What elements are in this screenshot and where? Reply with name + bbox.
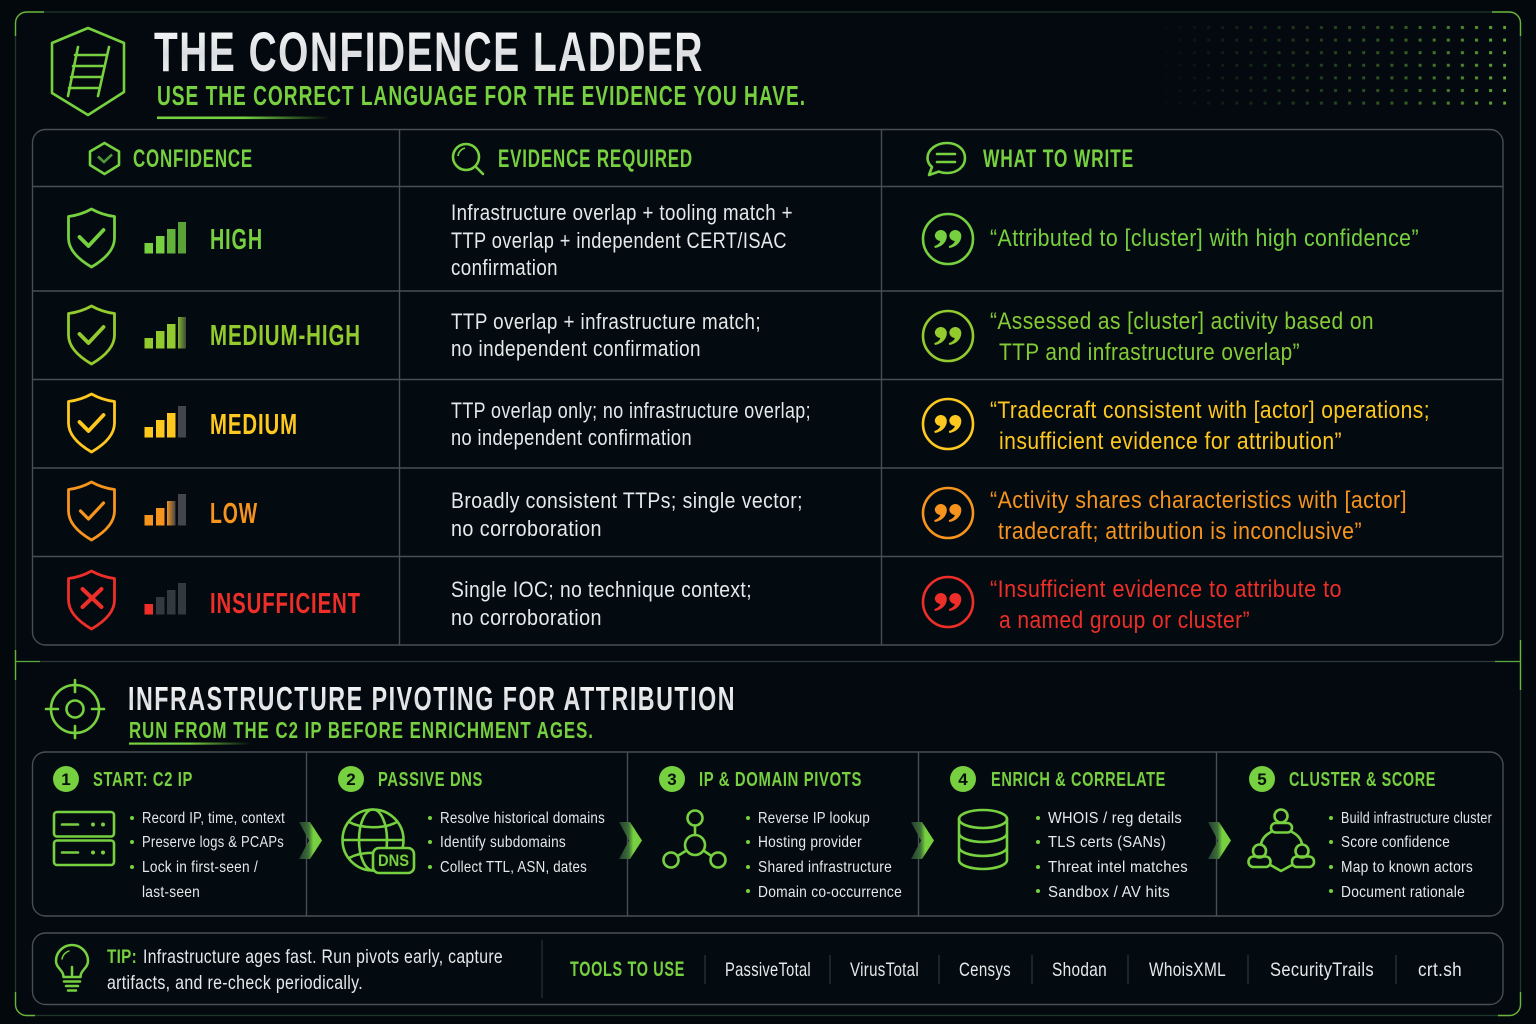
label: high: HIGH — [210, 224, 263, 256]
tip text: TIP: — [107, 946, 137, 968]
quote: low: tradecraft; attribution is inconclusive” — [998, 518, 1362, 545]
step 4 heading — [950, 766, 1166, 792]
tools list: Censys — [959, 959, 1011, 981]
icon: medium quote — [923, 399, 973, 449]
evidence: medium-high: no independent confirmation — [451, 336, 701, 361]
tip text: artifacts, and re-check periodically. — [107, 972, 363, 994]
table header: confidence — [90, 143, 253, 174]
panel: confidence table — [32, 130, 1503, 645]
icon: globe with DNS badge — [342, 810, 414, 873]
step 1 heading: START: C2 IP — [93, 768, 193, 791]
icon: insufficient quote — [923, 577, 973, 627]
quote: medium: insufficient evidence for attribution” — [999, 428, 1342, 455]
icon: high shield — [68, 209, 114, 267]
icon: globe with DNS badge: DNS — [378, 851, 409, 870]
quote: medium-high: “Assessed as [cluster] activity based on — [990, 308, 1374, 335]
quote: medium-high: TTP and infrastructure overlap” — [999, 339, 1300, 366]
evidence: insufficient — [451, 577, 752, 630]
evidence: high: TTP overlap + independent CERT/ISAC — [451, 228, 787, 253]
icon: high quote — [923, 214, 973, 264]
quote: insufficient — [990, 576, 1342, 634]
step 1 bullets: Record IP, time, context — [142, 810, 285, 827]
step 4 bullets: Sandbox / AV hits — [1048, 884, 1170, 901]
evidence: medium: TTP overlap only; no infrastructure overlap; — [451, 398, 811, 423]
tools list — [705, 955, 1462, 984]
tip text — [107, 946, 503, 994]
tools list: PassiveTotal — [725, 959, 811, 981]
row: medium — [68, 394, 1430, 455]
quote: high: “Attributed to [cluster] with high confidence” — [990, 225, 1419, 252]
step 1 heading: 1 — [61, 770, 71, 789]
quote: medium: “Tradecraft consistent with [actor] operations; — [990, 397, 1430, 424]
quote: medium — [990, 397, 1430, 455]
step 3 bullets: Reverse IP lookup — [758, 810, 870, 827]
section heading: INFRASTRUCTURE PIVOTING FOR ATTRIBUTION — [128, 681, 736, 718]
icon: low shield — [68, 482, 114, 540]
step 4 bullets — [1036, 810, 1188, 901]
step 1 bullets: Preserve logs & PCAPs — [142, 834, 284, 851]
icon: shield with ladder — [52, 28, 124, 115]
step 3 bullets — [746, 810, 902, 901]
icon: medium-high shield — [68, 306, 114, 364]
step 3 — [659, 766, 902, 901]
step 2 bullets — [428, 810, 605, 876]
icon: network nodes — [664, 810, 726, 868]
step 4 heading: 4 — [958, 770, 968, 789]
icon: server — [54, 812, 114, 865]
icon: insufficient signal bars — [144, 583, 186, 614]
step 1 bullets — [130, 810, 285, 901]
evidence: low: Broadly consistent TTPs; single vector; — [451, 488, 803, 513]
step 4 bullets: TLS certs (SANs) — [1048, 834, 1166, 851]
icon: low quote — [923, 488, 973, 538]
evidence: medium: no independent confirmation — [451, 425, 692, 450]
step 5 bullets: Document rationale — [1341, 884, 1465, 901]
evidence: high: Infrastructure overlap + tooling match + — [451, 200, 793, 225]
icon: target — [46, 680, 104, 738]
quote: low — [990, 487, 1407, 545]
icon: medium-high signal bars — [144, 317, 186, 348]
table header: what to write: WHAT TO WRITE — [983, 145, 1134, 173]
arrow 1 — [299, 822, 322, 859]
label: insufficient: INSUFFICIENT — [210, 588, 361, 620]
evidence: high: confirmation — [451, 255, 558, 280]
title: THE CONFIDENCE LADDER — [154, 20, 704, 83]
evidence: medium-high: TTP overlap + infrastructure match; — [451, 309, 761, 334]
row: medium-high — [68, 306, 1374, 366]
arrow 2 — [619, 822, 642, 859]
icon: medium signal bars — [144, 406, 186, 438]
evidence: low: no corroboration — [451, 516, 602, 541]
table header: what to write — [928, 143, 1134, 175]
tools list: crt.sh — [1418, 959, 1462, 981]
label: low: LOW — [210, 498, 258, 530]
icon: database — [959, 810, 1007, 869]
step 3 bullets: Domain co-occurrence — [758, 884, 902, 901]
step 3 bullets: Hosting provider — [758, 834, 862, 851]
row: low — [68, 482, 1407, 545]
table header: evidence required — [453, 144, 693, 174]
section underline — [129, 742, 251, 745]
label: medium: MEDIUM — [210, 409, 298, 441]
step 2 bullets: Collect TTL, ASN, dates — [440, 859, 587, 876]
icon: light bulb — [56, 945, 88, 990]
step 2 heading — [338, 766, 483, 792]
quote: insufficient: a named group or cluster” — [999, 607, 1250, 634]
quote: low: “Activity shares characteristics with [actor] — [990, 487, 1407, 514]
quote: insufficient: “Insufficient evidence to attribute to — [990, 576, 1342, 603]
step 3 heading: 3 — [667, 770, 677, 789]
subtitle: USE THE CORRECT LANGUAGE FOR THE EVIDENCE YOU HAVE. — [157, 80, 806, 111]
step 5 bullets: Build infrastructure cluster — [1341, 810, 1492, 827]
step 2 heading: 2 — [346, 770, 356, 789]
icon: low signal bars — [144, 494, 186, 526]
step 4 — [950, 766, 1188, 901]
tools list: VirusTotal — [850, 959, 919, 981]
panel: pivot steps — [32, 752, 1503, 916]
step 4 bullets: WHOIS / reg details — [1048, 810, 1182, 827]
table header: evidence required: EVIDENCE REQUIRED — [498, 145, 693, 173]
icon: medium-high quote — [923, 311, 973, 361]
arrow 4 — [1208, 822, 1231, 859]
step 2 — [338, 766, 605, 876]
step 5 heading: CLUSTER & SCORE — [1289, 768, 1436, 791]
evidence: medium — [451, 398, 811, 450]
step 5 bullets: Score confidence — [1341, 834, 1450, 851]
step 1 heading — [53, 766, 193, 792]
tip text: Infrastructure ages fast. Run pivots early, capture — [143, 946, 503, 968]
evidence: low — [451, 488, 803, 541]
label: medium-high: MEDIUM-HIGH — [210, 320, 361, 352]
quote: medium-high — [990, 308, 1374, 366]
step 5 — [1248, 766, 1492, 901]
step 2 bullets: Identify subdomains — [440, 834, 566, 851]
tools list: Shodan — [1052, 959, 1107, 981]
icon: medium shield — [68, 394, 114, 452]
table header: confidence: CONFIDENCE — [133, 145, 253, 173]
step 2 bullets: Resolve historical domains — [440, 810, 605, 827]
step 5 bullets — [1329, 810, 1492, 901]
row: insufficient — [68, 571, 1342, 634]
tools list: SecurityTrails — [1270, 959, 1374, 981]
evidence: insufficient: Single IOC; no technique context; — [451, 577, 752, 602]
evidence: medium-high — [451, 309, 761, 361]
step 1 — [53, 766, 285, 901]
step 4 bullets: Threat intel matches — [1048, 859, 1188, 876]
step 4 heading: ENRICH & CORRELATE — [991, 768, 1166, 791]
evidence: insufficient: no corroboration — [451, 605, 602, 630]
step 5 bullets: Map to known actors — [1341, 859, 1473, 876]
step 3 heading: IP & DOMAIN PIVOTS — [699, 768, 862, 791]
row: high — [68, 200, 1419, 280]
decorative dot grid — [1180, 26, 1506, 105]
step 1 bullets: last-seen — [142, 884, 200, 901]
step 2 heading: PASSIVE DNS — [378, 768, 483, 791]
step 5 heading — [1249, 766, 1436, 792]
section subtitle: RUN FROM THE C2 IP BEFORE ENRICHMENT AGES. — [129, 717, 594, 743]
step 3 bullets: Shared infrastructure — [758, 859, 892, 876]
step 1 bullets: Lock in first-seen / — [142, 859, 258, 876]
icon: cluster of people — [1248, 810, 1314, 871]
arrow 3 — [911, 822, 934, 859]
panel: tip and tools — [32, 933, 1503, 1004]
tools list: WhoisXML — [1149, 959, 1226, 981]
tools label: TOOLS TO USE — [570, 958, 685, 981]
step 5 heading: 5 — [1257, 770, 1267, 789]
icon: insufficient shield — [68, 571, 114, 629]
step 3 heading — [659, 766, 862, 792]
icon: high signal bars — [144, 222, 186, 254]
subtitle underline — [157, 116, 330, 119]
evidence: high — [451, 200, 793, 280]
